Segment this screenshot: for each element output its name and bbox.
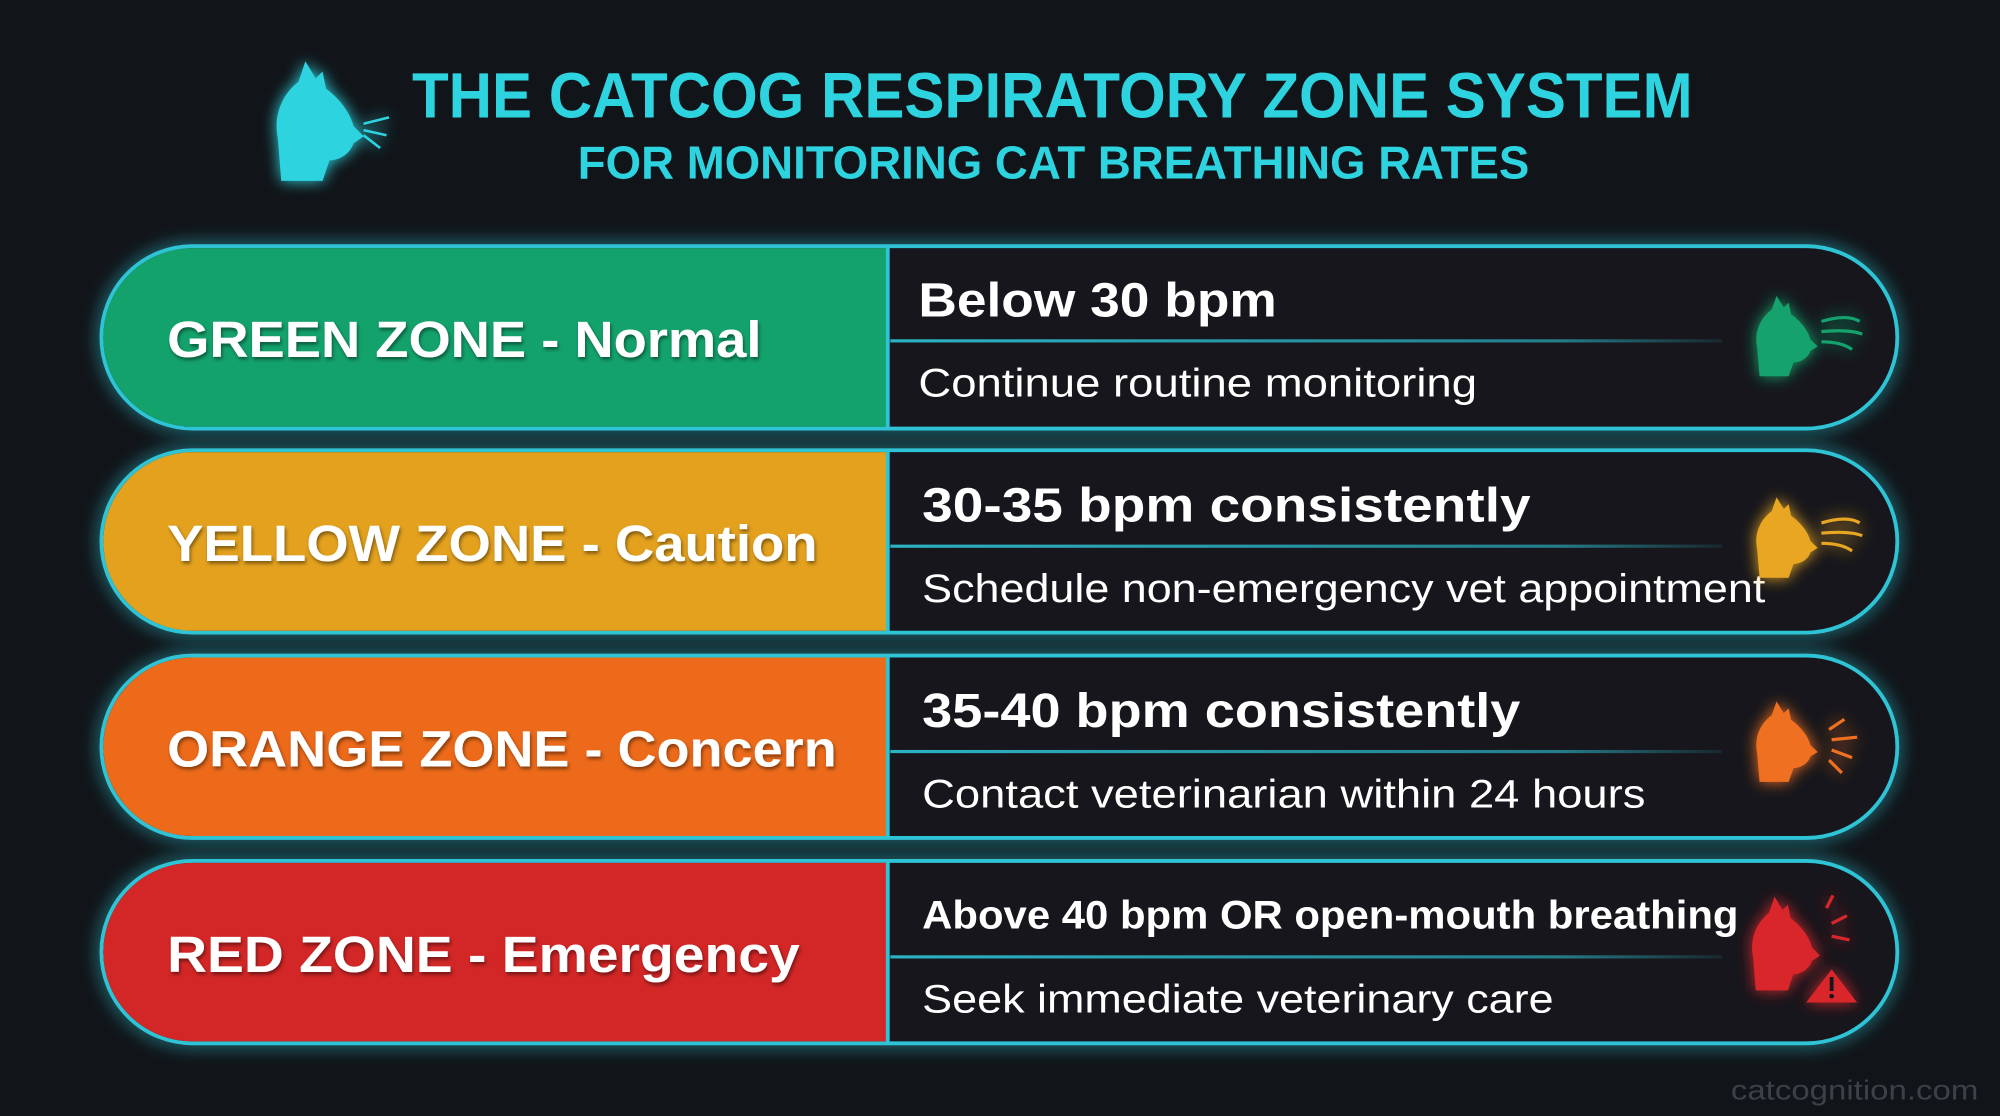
panel: yellow zone: [101, 450, 1897, 633]
panel: orange zone: [101, 656, 1897, 838]
panel: orange zone: ORANGE ZONE - Concern: [167, 721, 837, 778]
icon: cat head logo: [277, 61, 389, 181]
panel: green zone: Continue routine monitoring: [918, 362, 1477, 406]
panel: red zone: [101, 861, 1897, 1043]
panel: red zone: Above 40 bpm OR open-mouth breathing: [922, 894, 1739, 938]
icon: distressed cat with warning: [1752, 895, 1857, 1002]
panel: red zone: RED ZONE - Emergency: [167, 926, 800, 983]
panel: green zone: [101, 246, 1897, 429]
icon: cat panting: [1756, 701, 1857, 782]
panel: orange zone: Contact veterinarian within 24 hours: [922, 772, 1645, 816]
panel: orange zone: 35-40 bpm consistently: [922, 684, 1520, 738]
panel: yellow zone: 30-35 bpm consistently: [922, 479, 1531, 533]
panel: green zone: Below 30 bpm: [918, 273, 1277, 327]
panel: red zone: Seek immediate veterinary care: [922, 978, 1554, 1022]
panel: yellow zone: YELLOW ZONE - Caution: [167, 515, 818, 572]
panel: yellow zone: Schedule non-emergency vet appointment: [922, 567, 1765, 611]
subtitle: FOR MONITORING CAT BREATHING RATES: [578, 137, 1529, 189]
panel: green zone: GREEN ZONE - Normal: [167, 311, 761, 368]
watermark: catcognition.com: [1731, 1074, 1978, 1105]
title: THE CATCOG RESPIRATORY ZONE SYSTEM: [412, 59, 1693, 131]
icon: cat breathing: [1756, 497, 1862, 578]
icon: calm cat: [1756, 296, 1862, 376]
